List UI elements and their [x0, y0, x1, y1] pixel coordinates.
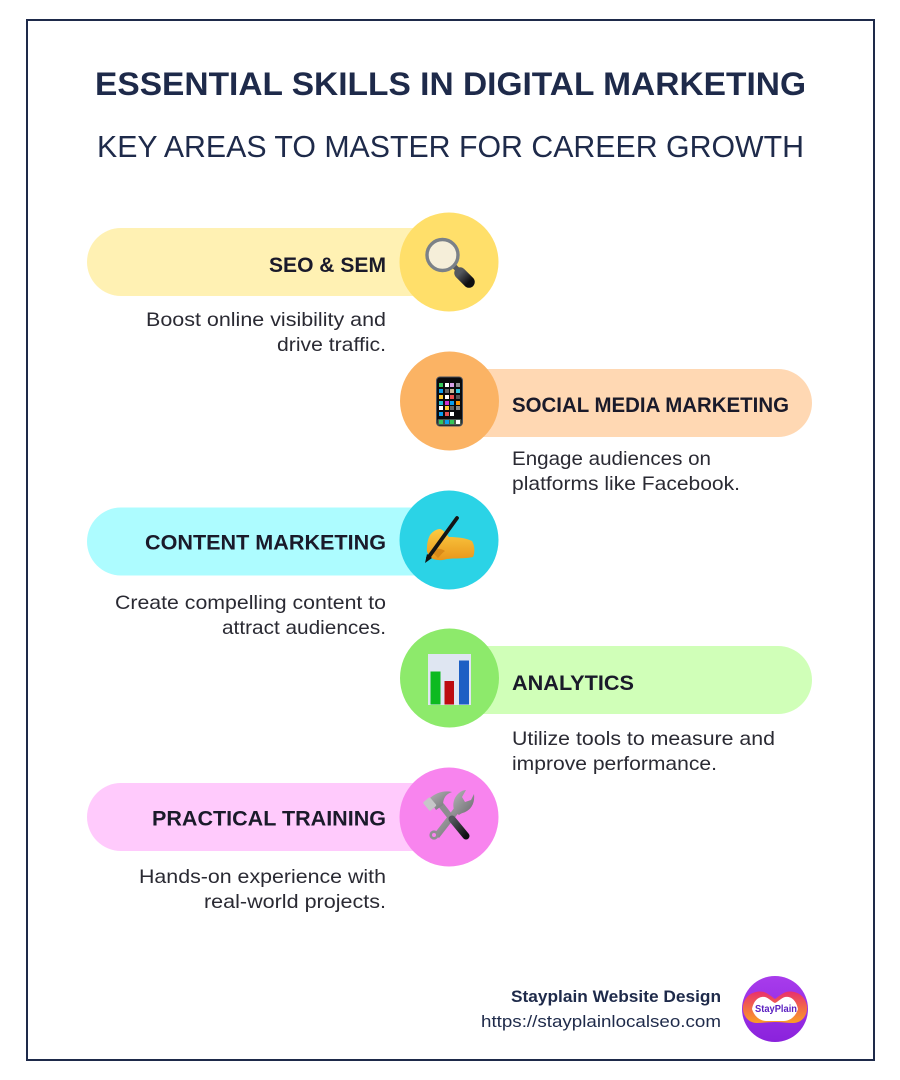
description: Practical Training: Hands-on experience with [139, 866, 386, 888]
heading: Analytics: ANALYTICS [512, 672, 634, 695]
description: Content Marketing: Create compelling content to [115, 592, 386, 614]
pill: Social Media Marketing [450, 369, 812, 437]
description: SEO & SEM [146, 309, 386, 356]
icon: bar chart [400, 628, 499, 728]
description: Analytics: improve performance. [512, 753, 717, 775]
heading: SEO & SEM: SEO & SEM [269, 254, 386, 277]
icon: hammer and wrench [400, 768, 498, 866]
pill: Content Marketing [87, 508, 449, 576]
heading: Practical Training: PRACTICAL TRAINING [152, 808, 386, 830]
description: Practical Training: real-world projects. [204, 891, 386, 913]
description: Analytics [512, 728, 775, 775]
description: Content Marketing [115, 592, 386, 639]
title: ESSENTIAL SKILLS IN DIGITAL MARKETING [95, 66, 806, 102]
description: SEO & SEM: Boost online visibility and [146, 309, 386, 331]
panel: Social Media Marketing [400, 352, 812, 495]
subtitle: KEY AREAS TO MASTER FOR CAREER GROWTH [97, 130, 804, 164]
icon: magnifying glass [400, 212, 498, 312]
heading: Content Marketing: CONTENT MARKETING [145, 532, 386, 554]
logo: StayPlain: StayPlain [755, 1003, 797, 1015]
description: Analytics: Utilize tools to measure and [512, 728, 775, 750]
description: Social Media Marketing [512, 448, 740, 495]
panel: SEO & SEM [87, 212, 498, 356]
description: Content Marketing: attract audiences. [222, 617, 386, 639]
footer url: https://stayplainlocalseo.com [481, 1013, 721, 1031]
description: Social Media Marketing: Engage audiences on [512, 448, 711, 470]
heading: Social Media Marketing: SOCIAL MEDIA MARKETING [512, 394, 789, 417]
icon: writing hand [400, 490, 498, 590]
panel: Analytics [400, 628, 812, 775]
panel: Content Marketing [87, 490, 498, 639]
description: Social Media Marketing: platforms like Facebook. [512, 473, 740, 495]
pill: Practical Training [87, 783, 449, 851]
panel: Practical Training [87, 768, 498, 913]
footer brand name: Stayplain Website Design [511, 988, 721, 1006]
icon: smartphone [400, 352, 499, 450]
description: SEO & SEM: drive traffic. [277, 334, 386, 356]
logo: StayPlain [742, 976, 808, 1042]
description: Practical Training [139, 866, 386, 913]
pill: Analytics [450, 646, 812, 714]
pill: SEO & SEM [87, 228, 449, 296]
